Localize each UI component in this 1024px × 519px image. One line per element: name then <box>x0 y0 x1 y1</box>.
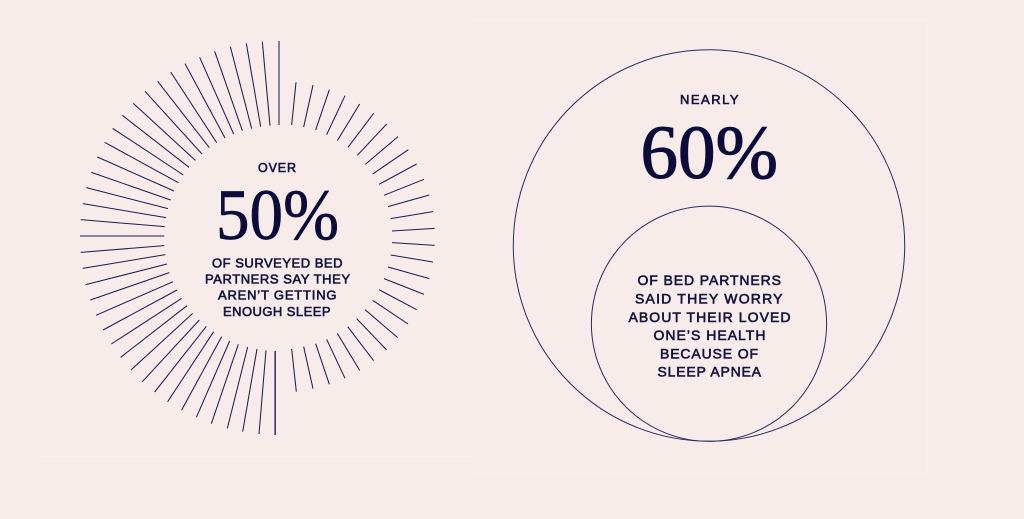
label: over: OVER <box>258 161 296 175</box>
text: surveyed bed partners: AREN’T GETTING <box>218 288 336 302</box>
text: surveyed bed partners <box>205 256 350 319</box>
text: worry about loved one: SLEEP APNEA <box>658 364 762 380</box>
text: surveyed bed partners: OF SURVEYED BED <box>212 256 342 270</box>
text: worry about loved one: ABOUT THEIR LOVED <box>628 309 790 325</box>
stat: 60%: 60% <box>640 111 778 195</box>
text: worry about loved one: BECAUSE OF <box>660 346 758 362</box>
text: worry about loved one: ONE’S HEALTH <box>654 327 766 343</box>
text: surveyed bed partners: PARTNERS SAY THEY <box>205 272 350 286</box>
outer circle <box>513 50 905 441</box>
text: worry about loved one: SAID THEY WORRY <box>635 290 783 306</box>
text: surveyed bed partners: ENOUGH SLEEP <box>223 304 330 319</box>
text: worry about loved one <box>628 272 790 380</box>
text: worry about loved one: OF BED PARTNERS <box>638 272 781 288</box>
label: nearly: NEARLY <box>680 92 739 107</box>
radial tick chart <box>80 41 435 435</box>
inner circle <box>591 206 827 441</box>
stat: 50%: 50% <box>216 175 339 255</box>
